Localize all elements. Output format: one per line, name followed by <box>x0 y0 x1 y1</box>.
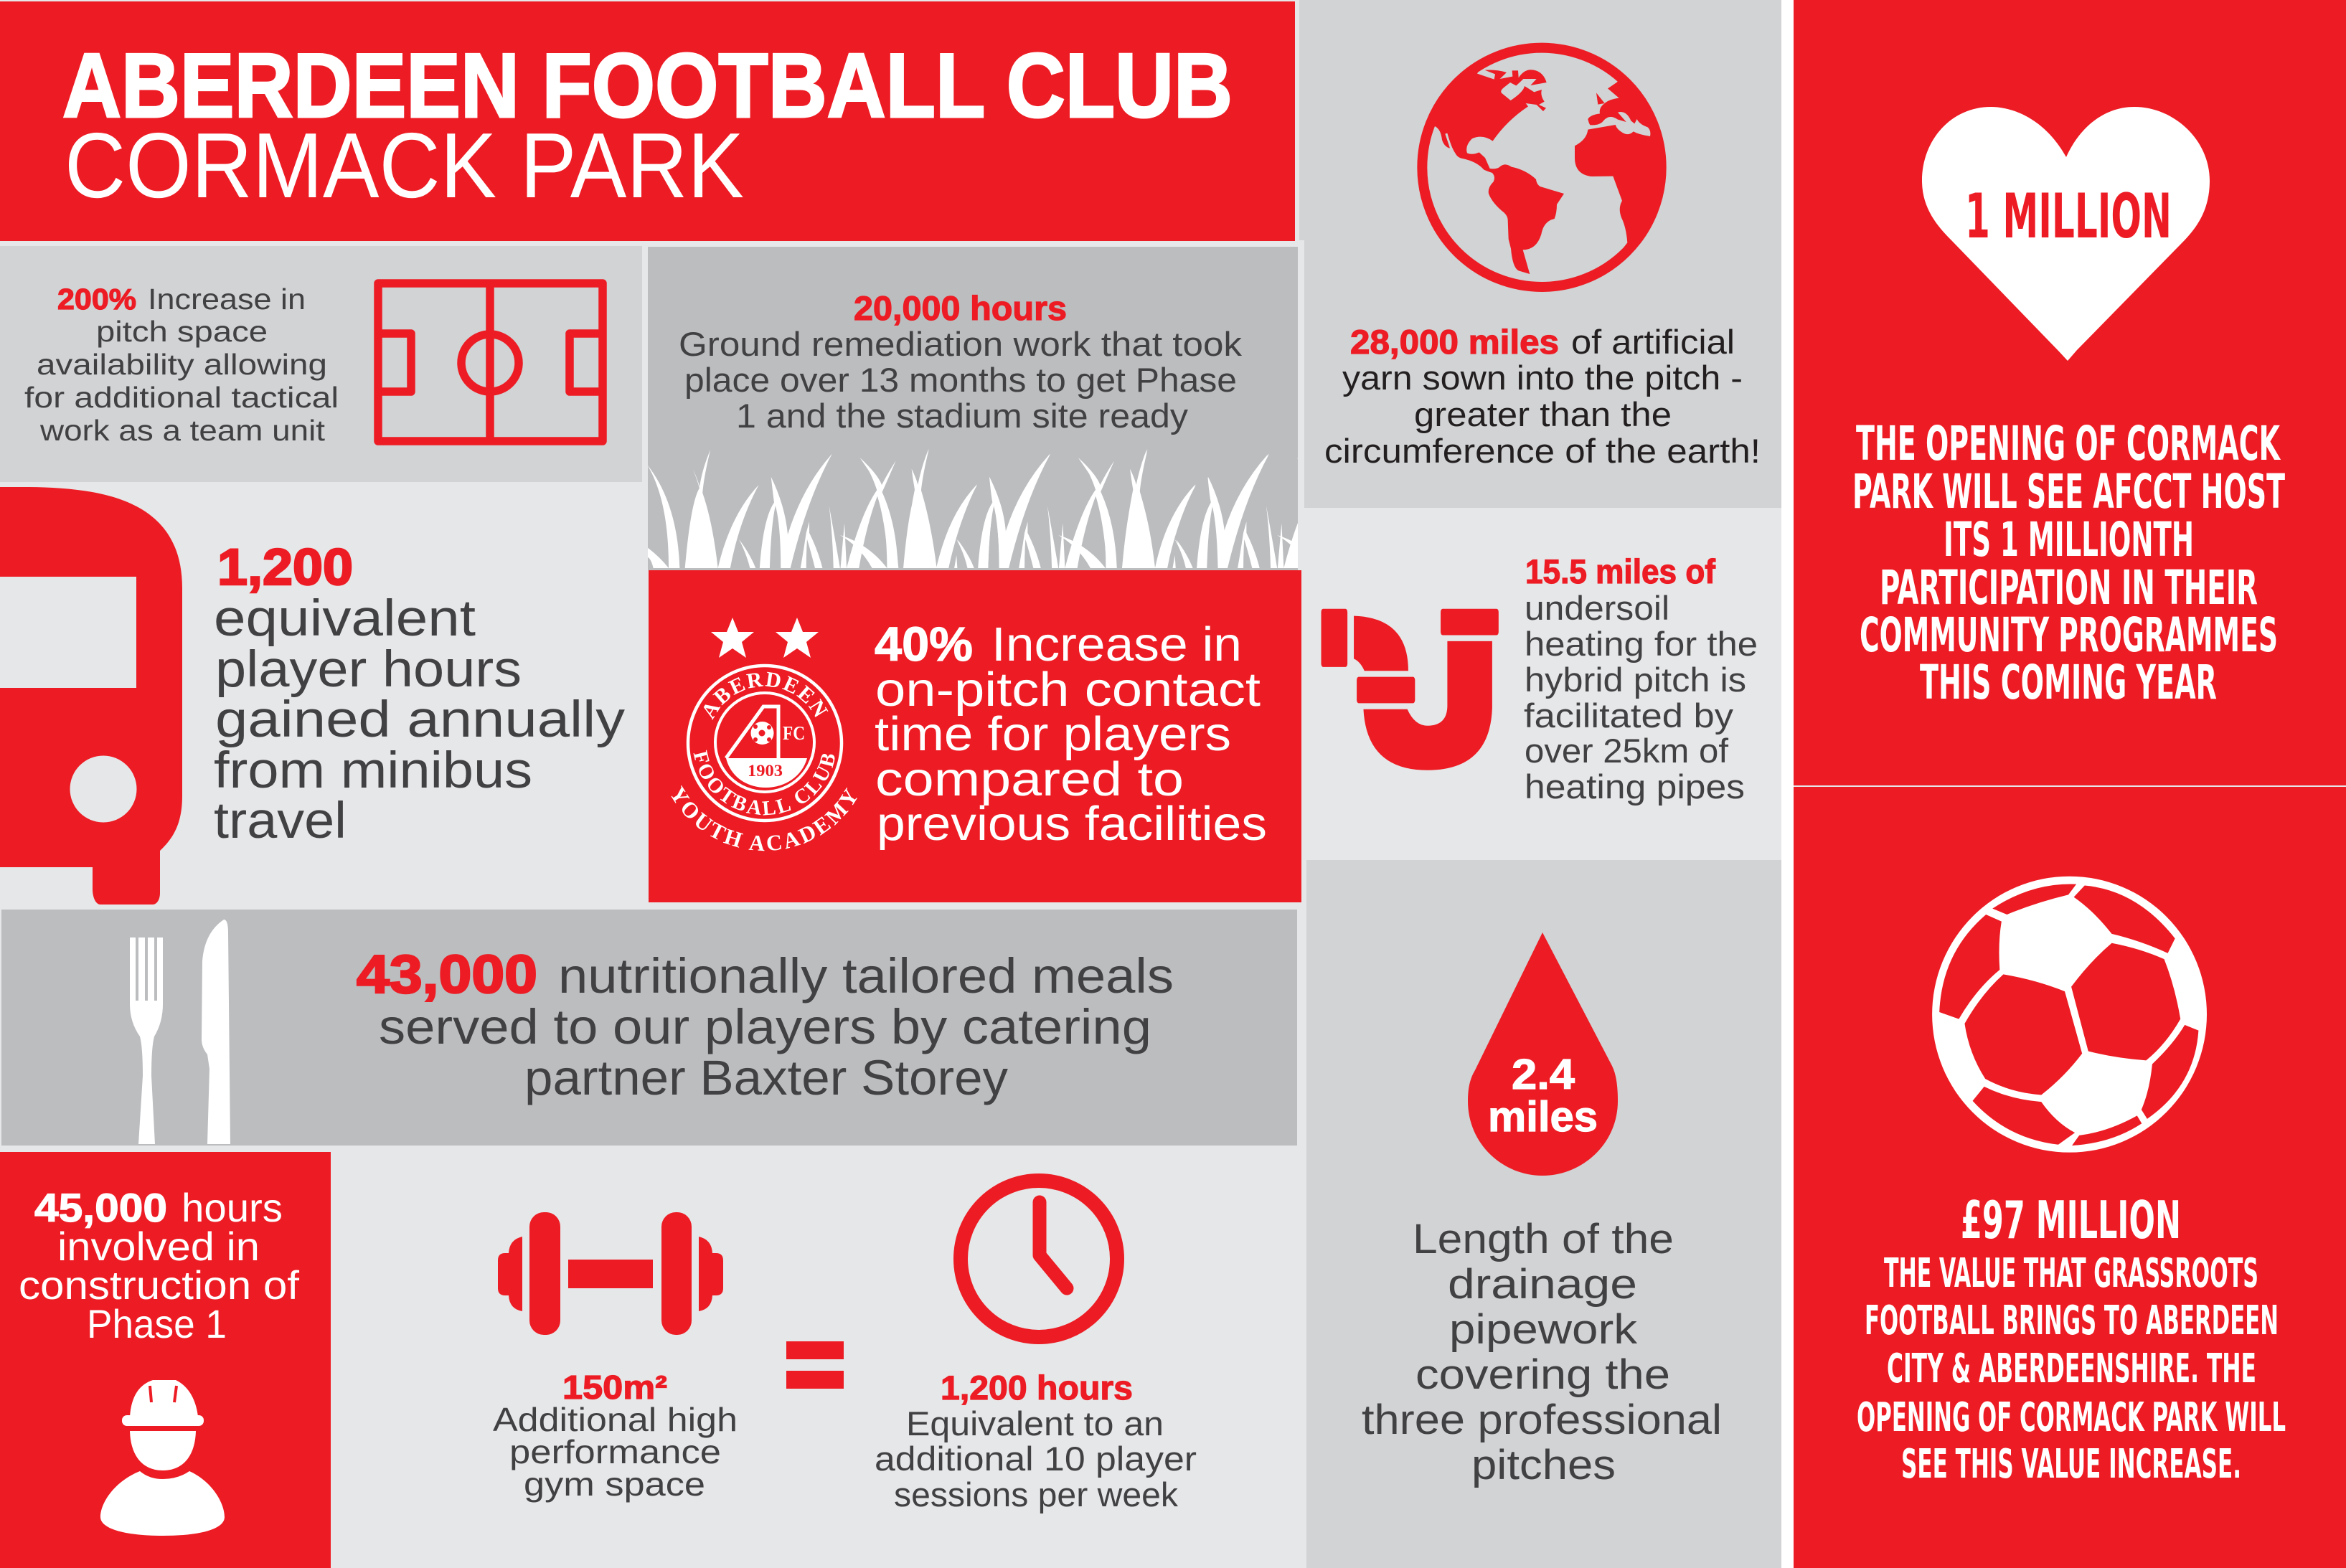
illustration: grass <box>648 449 1298 568</box>
text: drainage pipework <box>1362 1216 1722 1488</box>
text: 15.5 miles: heating pipes <box>1525 768 1745 806</box>
text: 200% increase: Increase in <box>148 283 306 316</box>
text: 40% increase: Increase in <box>991 618 1242 671</box>
text: 28,000 miles: circumference of the earth! <box>1324 432 1761 470</box>
text: 1,200 player hours: player hours <box>215 641 522 698</box>
text: 45,000 hours: involved in <box>57 1224 260 1269</box>
text: grassroots value description <box>1857 1250 2286 1488</box>
panel: gym space <box>493 1181 1197 1513</box>
icon: football pitch <box>378 283 603 441</box>
text: 150m2 gym space <box>493 1369 738 1503</box>
text: 45,000 hours: Phase 1 <box>87 1301 227 1346</box>
text: drainage pipework: Length of the <box>1413 1216 1674 1262</box>
text: 150m2 gym space: 150m² <box>562 1369 667 1406</box>
text: 28,000 miles: greater than the <box>1414 395 1672 433</box>
heading: stadium name: CORMACK PARK <box>65 114 744 217</box>
panel: title <box>0 1 1295 241</box>
icon: drop with 2.4 miles: 2.4 <box>1512 1051 1575 1098</box>
text: 28,000 miles: 28,000 miles <box>1350 323 1559 361</box>
text: 28,000 miles: yarn sown into the pitch - <box>1342 359 1743 397</box>
text: 200% increase: for additional tactical <box>24 381 339 414</box>
icon: globe <box>1422 48 1662 287</box>
logo: Aberdeen FC Youth Academy crest: YOUTH ACADEMY <box>672 785 857 851</box>
text: 45,000 hours: construction of <box>19 1262 299 1308</box>
text: 1,200 player hours: equivalent <box>214 590 476 647</box>
panel: community participation <box>1794 0 2346 785</box>
panel: contact time <box>649 570 1301 902</box>
panel: artificial yarn <box>1299 0 1781 508</box>
text: 1,200 player hours: from minibus <box>214 742 532 799</box>
logo: Aberdeen FC Youth Academy crest: FC <box>783 722 805 744</box>
icon: fork <box>130 938 163 1144</box>
icon: dumbbell <box>498 1212 723 1335</box>
text: 43,000 meals: served to our players by catering <box>379 999 1151 1054</box>
text: 45,000 hours: 45,000 <box>34 1185 167 1230</box>
text: drainage pipework: three professional <box>1362 1397 1722 1443</box>
text: 200% increase: work as a team unit <box>39 414 326 447</box>
text: 1,200 hours: Equivalent to an <box>906 1404 1164 1442</box>
text: 1,200 hours <box>875 1369 1197 1513</box>
text: 1,200 player hours: gained annually <box>215 691 626 748</box>
text: 200% increase: availability allowing <box>37 348 327 381</box>
text: 200% increase: pitch space <box>96 315 268 348</box>
logo: Aberdeen FC Youth Academy crest <box>672 618 857 851</box>
text: 1,200 player hours: 1,200 <box>217 539 353 596</box>
logo: Aberdeen FC Youth Academy crest: FOOTBALL CLUB <box>693 750 835 816</box>
panel: grassroots value <box>1794 787 2346 1568</box>
text: 150m2 gym space: performance <box>509 1433 721 1470</box>
icon: drop with 2.4 miles <box>1468 932 1618 1176</box>
logo: Aberdeen FC Youth Academy crest: ABERDEEN <box>703 671 828 720</box>
icon: drop with 2.4 miles: miles <box>1488 1093 1598 1140</box>
text: 43,000 meals: nutritionally tailored meals <box>558 948 1174 1003</box>
text: 15.5 miles: hybrid pitch is <box>1525 661 1746 699</box>
text: 1,200 hours: 1,200 hours <box>941 1369 1133 1407</box>
text: 1,200 hours: additional 10 player <box>875 1440 1197 1478</box>
text: 40% increase: previous facilities <box>877 797 1267 851</box>
text: drainage pipework: covering the <box>1415 1351 1670 1398</box>
text: 150m2 gym space: gym space <box>524 1465 705 1503</box>
text: 15.5 miles: facilitated by <box>1524 696 1734 735</box>
panel: construction hours <box>0 1152 331 1568</box>
text: community programmes: ITS 1 MILLIONTH <box>1944 512 2194 567</box>
text: 45,000 hours: hours <box>182 1185 283 1230</box>
icon: heart with 1 million <box>1922 107 2210 361</box>
panel: pitch space <box>0 246 642 482</box>
text: 28,000 miles <box>1324 323 1761 470</box>
text: 15.5 miles <box>1524 552 1758 806</box>
panel: drainage <box>1306 860 1781 1568</box>
text: 20,000 hours: 20,000 hours <box>854 289 1067 327</box>
text: drainage pipework: drainage <box>1448 1261 1637 1308</box>
icon: football <box>1932 877 2207 1153</box>
text: 45,000 hours <box>19 1185 299 1346</box>
text: 40% increase <box>875 618 1267 851</box>
text: 15.5 miles: 15.5 miles of <box>1525 552 1715 590</box>
icon: equals sign <box>786 1341 844 1389</box>
text: 28,000 miles: of artificial <box>1571 323 1735 361</box>
text: 20,000 hours <box>679 289 1243 435</box>
text: £97 million: £97 MILLION <box>1961 1190 2181 1250</box>
text: drainage pipework: pipework <box>1449 1306 1638 1353</box>
text: 1,200 hours: sessions per week <box>894 1475 1178 1513</box>
text: 43,000 meals <box>357 944 1174 1105</box>
text: 200% increase: 200% <box>57 283 136 316</box>
text: 40% increase: compared to <box>875 752 1184 806</box>
text: 150m2 gym space: Additional high <box>493 1401 738 1438</box>
text: 15.5 miles: over 25km of <box>1525 732 1729 770</box>
panel: ground remediation <box>646 247 1487 570</box>
text: 43,000 meals: 43,000 <box>357 944 537 1004</box>
text: 15.5 miles: heating for the <box>1525 625 1758 663</box>
text: 1,200 player hours: travel <box>214 793 347 849</box>
text: 40% increase: time for players <box>875 707 1231 761</box>
text: 1,200 player hours <box>214 539 626 849</box>
text: 20,000 hours: Ground remediation work that took <box>679 325 1243 363</box>
text: 20,000 hours: 1 and the stadium site ready <box>736 397 1189 435</box>
heading: club name: ABERDEEN FOOTBALL CLUB <box>62 34 1233 136</box>
text: 200% increase <box>24 283 339 447</box>
text: 40% increase: on-pitch contact <box>875 663 1261 717</box>
logo: Aberdeen FC Youth Academy crest: 1903 <box>748 762 783 780</box>
panel: undersoil heating <box>1322 552 1758 806</box>
text: drainage pipework: pitches <box>1471 1442 1616 1488</box>
icon: knife <box>202 920 230 1144</box>
icon: minibus <box>0 487 182 905</box>
icon: construction worker <box>100 1380 225 1536</box>
text: 43,000 meals: partner Baxter Storey <box>524 1050 1009 1105</box>
text: 15.5 miles: undersoil <box>1525 589 1669 627</box>
icon: clock <box>961 1181 1117 1337</box>
panel: meals <box>1 910 1297 1146</box>
icon: heart with 1 million: 1 MILLION <box>1965 181 2172 252</box>
icon: heating pipe <box>1322 609 1499 770</box>
text: 20,000 hours: place over 13 months to get Phase <box>684 361 1237 399</box>
text: 40% increase: 40% <box>875 618 973 671</box>
text: community programmes <box>1852 416 2285 710</box>
